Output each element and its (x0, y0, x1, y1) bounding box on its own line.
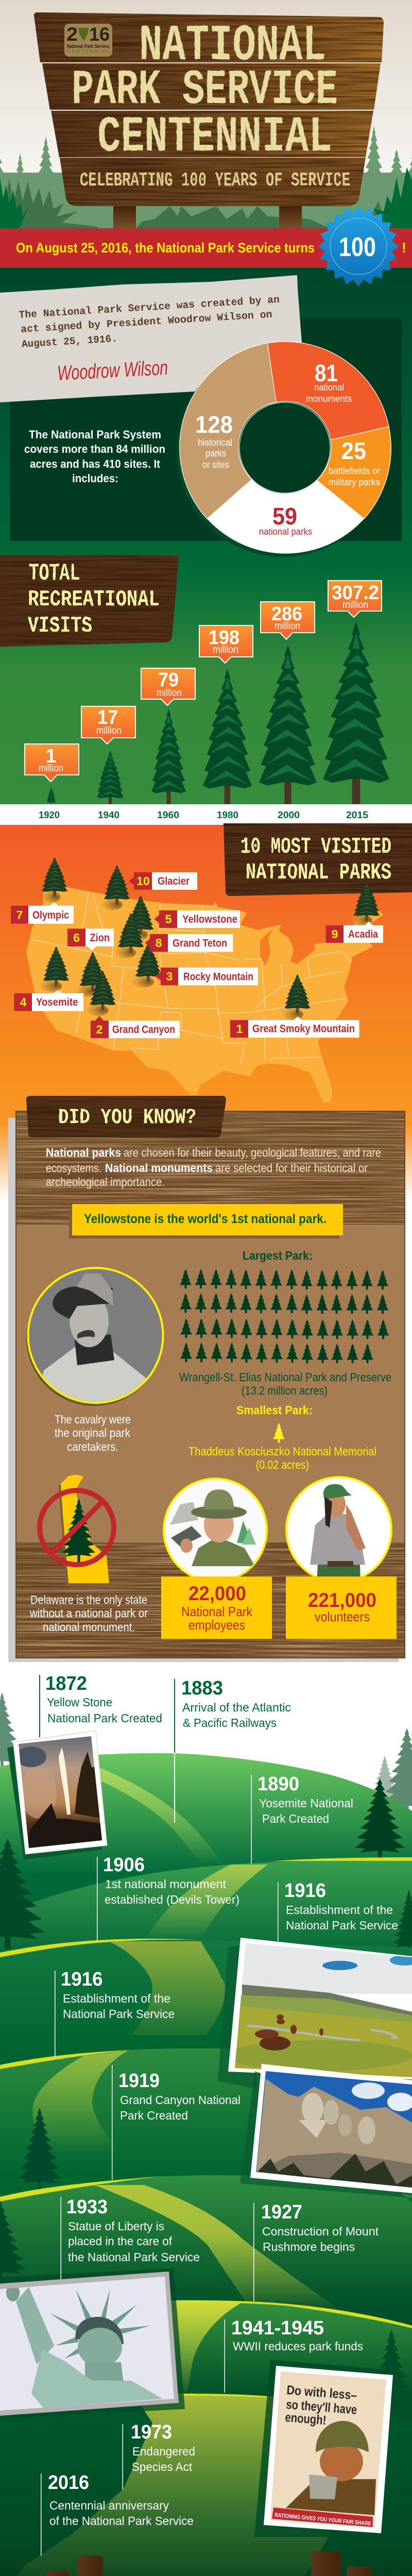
timeline: 1933 (61, 2196, 200, 2279)
timeline: 1916 left: 1916 (61, 1969, 103, 1990)
timeline background: hills and trees (0, 1692, 412, 2576)
map label: 5 Yellowstone: 5 (165, 912, 172, 926)
map label: 10 Glacier (129, 872, 197, 890)
text: national park system summary: covers more than 84 million (24, 443, 165, 455)
timeline photo: rationing poster: enough! (285, 2410, 327, 2428)
map label: 1 Great Smoky Mountain: 1 (236, 1022, 243, 1036)
portrait: park ranger (164, 1479, 267, 1582)
heading sign: did you know: DID YOU KNOW? (58, 1105, 196, 1130)
label: 59 national parks (259, 503, 312, 537)
portrait: park volunteer (286, 1477, 391, 1582)
timeline: 1927 (253, 2201, 379, 2301)
timeline: 1916 right: National Park Service (286, 1919, 398, 1932)
timeline: 2016 (41, 2472, 194, 2556)
callout: yellowstone: Yellowstone is the world's 1st national park. (84, 1212, 327, 1226)
text: parks versus monuments: ecosystems. (46, 1161, 101, 1175)
label: 128 historical parks (195, 411, 233, 470)
2016 centennial logo: National Park Service. (67, 44, 110, 49)
callout: 79 million: million (157, 688, 182, 699)
text: cavalry caretakers: the original park (55, 1426, 130, 1439)
chart axis: years: 1960 (157, 810, 179, 820)
map label: 1 Great Smoky Mountain: Great Smoky Mountain (252, 1023, 355, 1035)
wooden title sign planks (34, 12, 384, 206)
chart axis: years: 1980 (217, 810, 238, 820)
map label: 6 Zion: 6 (73, 931, 80, 944)
segment: national monuments (267, 342, 389, 440)
label: 25 battlefields: battlefields or (329, 466, 380, 476)
badge: 100 (318, 206, 399, 286)
note text: August 25, 1916. (21, 333, 117, 351)
label: 81 national monuments: national (314, 382, 344, 393)
callout: 286 million: 286 (271, 603, 302, 625)
timeline: 1973 (123, 2421, 195, 2490)
timeline: 1919: Grand Canyon National (120, 2093, 241, 2107)
timeline: 1933: the National Park Service (68, 2250, 200, 2264)
chart axis: years (0, 804, 412, 825)
text: cavalry caretakers: caretakers. (67, 1440, 118, 1453)
map label: 3 Rocky Mountain: Rocky Mountain (183, 971, 253, 983)
timeline photo: rationing poster: RATIONING GIVES YOU YOUR FAIR SHARE (274, 2512, 371, 2527)
anniversary banner (0, 228, 412, 268)
map label: 8 Grand Teton (145, 934, 233, 952)
2016 centennial logo: 2 (66, 24, 78, 45)
map label: 7 Olympic: Olympic (32, 909, 69, 921)
timeline: 1906: 1st national monument (105, 1877, 227, 1891)
label: 59 national parks: 59 (272, 503, 297, 530)
segment: historical parks (180, 343, 276, 519)
text: Thaddeus Kosciuszko: Thaddeus Kosciuszko National Memorial (188, 1445, 376, 1458)
text: parks versus monuments: archeological importance. (46, 1175, 165, 1189)
2016 centennial logo (64, 24, 112, 57)
text: cavalry caretakers: The cavalry were (55, 1413, 131, 1426)
label: 128 historical parks: 128 (195, 411, 233, 438)
timeline: 1919: 1919 (118, 2070, 160, 2092)
timeline: 1919 (112, 2065, 241, 2180)
title text: CENTENNIAL (97, 109, 332, 166)
timeline: 1906: 1906 (103, 1854, 145, 1876)
anniversary banner: On August 25, 2016, the National Park Service turns (16, 240, 315, 256)
timeline: 1941-1945: 1941-1945 (231, 2317, 324, 2339)
text: Wrangell-St. Elias: (13.2 million acres) (242, 1384, 328, 1397)
title text (72, 18, 350, 192)
label: 128 historical parks: parks (205, 448, 226, 459)
timeline: 2016: of the National Park Service (49, 2514, 194, 2528)
bar chart: tree heights per year (47, 621, 389, 805)
text: Thaddeus Kosciuszko: (0.02 acres) (256, 1458, 309, 1471)
section background: orange (0, 825, 412, 1201)
heading sign: total recreational visits: RECREATIONAL (28, 587, 160, 613)
timeline photo: rationing poster (254, 2360, 393, 2537)
icon chart: largest park trees (180, 1269, 389, 1363)
timeline: 1890: Yosemite National (259, 1797, 353, 1810)
label: 25 battlefields (329, 437, 380, 487)
text: largest park: Largest Park: (243, 1249, 313, 1262)
timeline: 1872: 1872 (45, 1673, 87, 1694)
timeline: 1927: Construction of Mount (262, 2225, 379, 2238)
timeline: 1872 (39, 1673, 162, 1737)
timeline: 1872: National Park Created (47, 1711, 162, 1725)
map label: 4 Yosemite: 4 (20, 995, 27, 1009)
text: national park system summary: acres and has 410 sites. It (30, 457, 161, 470)
timeline photo: bison in yellowstone (218, 1937, 412, 2089)
map label: 5 Yellowstone (154, 910, 240, 928)
callout: 198 million: 198 (209, 627, 239, 649)
label: 128 historical parks: historical (198, 437, 232, 448)
donut chart: park types (177, 342, 391, 557)
label: 25 battlefields: military parks (329, 477, 380, 487)
map label: 6 Zion: Zion (90, 932, 110, 944)
heading sign: total recreational visits: VISITS (28, 613, 92, 639)
callout: 307.2 million (328, 581, 382, 617)
callout: 198 million: million (213, 645, 238, 655)
tree 1940 (97, 751, 124, 805)
stat: 221,000 volunteers (286, 1577, 397, 1639)
label: 128 historical parks: or sites (202, 460, 229, 470)
timeline: 1883: Arrival of the Atlantic (182, 1701, 291, 1714)
stat: 221,000 volunteers: 221,000 (308, 1589, 376, 1612)
text: national park system summary: The National Park System (29, 428, 161, 441)
map label: 7 Olympic: 7 (16, 908, 23, 922)
chart axis: years: 1920 (39, 810, 60, 820)
timeline: 1883: & Pacific Railways (183, 1716, 277, 1730)
chart axis: years: 2015 (346, 810, 368, 820)
timeline: 1890: 1890 (258, 1773, 299, 1795)
heading sign: did you know (26, 1096, 226, 1138)
tree 2000 (259, 645, 317, 805)
segment: national parks (207, 479, 364, 554)
timeline: 1916 left (55, 1969, 175, 2057)
timeline: 1890 (251, 1773, 353, 1863)
callout: 79 million: 79 (158, 669, 179, 691)
map label: 4 Yosemite (14, 990, 83, 1011)
text: cavalry caretakers (55, 1413, 131, 1453)
note text: The National Park Service was created by an (19, 294, 280, 321)
map label: 7 Olympic (11, 902, 74, 924)
timeline: 1883: 1883 (181, 1677, 223, 1699)
map label: 10 Glacier: Glacier (158, 875, 190, 887)
map markers: trees (40, 857, 380, 1020)
icon: smallest park tree (273, 1423, 285, 1443)
section background: green (0, 268, 412, 804)
timeline: 1916 right: Establishment of the (286, 1903, 393, 1917)
title text: NATIONAL (139, 18, 326, 75)
text: national park system summary: includes: (72, 472, 118, 485)
timeline photo: geyser (7, 1731, 107, 1860)
map label: 2 Grand Canyon (91, 1016, 180, 1038)
timeline photo: rationing poster: Do with less– (286, 2383, 357, 2403)
text: delaware fact: without a national park or (29, 1606, 148, 1620)
label: 81 national monuments (306, 360, 352, 404)
portrait: cavalry officer (26, 1267, 164, 1406)
map label: 1 Great Smoky Mountain (230, 1016, 359, 1038)
segment: battlefields (317, 427, 391, 519)
timeline: 2016: 2016 (48, 2472, 89, 2494)
callout: 198 million (199, 625, 253, 663)
stat: 22,000 national park employees: 22,000 (188, 1583, 246, 1605)
heading sign: total recreational visits: TOTAL (29, 560, 80, 587)
timeline: 1973: Species Act (132, 2460, 193, 2473)
label: 25 battlefields: 25 (341, 437, 366, 464)
map label: 2 Grand Canyon: 2 (96, 1023, 102, 1036)
map label: 5 Yellowstone: Yellowstone (182, 913, 237, 925)
text: Wrangell-St. Elias (179, 1370, 391, 1397)
map label: 3 Rocky Mountain (155, 968, 258, 985)
timeline: 1941-1945 (225, 2317, 363, 2393)
text: delaware fact: national monument. (43, 1620, 135, 1634)
2016 centennial logo: 16 (89, 24, 110, 45)
callout: 307.2 million: million (342, 600, 368, 611)
text: delaware fact: Delaware is the only state (30, 1593, 147, 1606)
text: smallest park: Smallest Park: (236, 1403, 313, 1417)
timeline photo: rationing poster: so they'll have (286, 2397, 357, 2417)
anniversary banner: ! (402, 240, 406, 256)
map label: 8 Grand Teton: Grand Teton (173, 938, 227, 949)
text: Thaddeus Kosciuszko (188, 1445, 376, 1471)
map label: 3 Rocky Mountain: 3 (166, 970, 173, 983)
map label: 9 Acadia: 9 (332, 927, 338, 941)
callout: 1 million: million (39, 763, 63, 774)
text: parks versus monuments: are selected for their historical or (215, 1161, 368, 1175)
timeline: 1916 left: Establishment of the (63, 1992, 170, 2005)
sign posts (113, 206, 302, 229)
map label: 10 Glacier: 10 (136, 874, 150, 888)
timeline: 1916 right: 1916 (284, 1880, 326, 1902)
text: delaware fact (29, 1593, 148, 1634)
text: parks versus monuments: National parks (46, 1146, 121, 1159)
label: 59 national parks: national parks (259, 527, 312, 537)
callout: 79 million (141, 668, 195, 705)
map label: 4 Yosemite: Yosemite (36, 996, 78, 1008)
signature: Woodrow Wilson (57, 357, 168, 385)
timeline: 1933: placed in the care of (68, 2234, 173, 2248)
map label: 9 Acadia (326, 922, 383, 943)
map label: 8 Grand Teton: 8 (156, 936, 162, 950)
chart axis: years: 1940 (98, 810, 119, 820)
timeline: 2016: Centennial anniversary (49, 2499, 169, 2512)
hero background: sky and treeline (0, 0, 412, 232)
text: parks versus monuments: National monuments (105, 1161, 213, 1175)
callout: 1 million: 1 (45, 745, 57, 767)
timeline: 1973: 1973 (131, 2421, 172, 2443)
timeline: 1883 (174, 1677, 291, 1823)
stat: 221,000 volunteers: volunteers (315, 1609, 370, 1624)
heading sign: total recreational visits (0, 555, 179, 647)
tree 1920 (47, 787, 56, 805)
timeline photo: statue of liberty (0, 2268, 185, 2418)
timeline: 1906 (97, 1854, 239, 1941)
tree 1960 (151, 709, 186, 805)
heading sign: 10 most visited national parks (224, 823, 412, 896)
label: 81 national monuments: 81 (315, 360, 338, 386)
timeline photo: mount rushmore (240, 2064, 412, 2202)
timeline: 1906: established (Devils Tower) (105, 1893, 239, 1906)
callout: 17 million (81, 706, 135, 744)
text: parks versus monuments: are chosen for their beauty, geological features, and rare (124, 1146, 381, 1159)
callout: 17 million: 17 (97, 707, 118, 728)
stat: 22,000 national park employees: employees (188, 1617, 245, 1633)
timeline: 1973: Endangered (132, 2445, 195, 2458)
timeline: 1890: Park Created (262, 1812, 329, 1825)
map label: 9 Acadia: Acadia (348, 928, 378, 940)
chart axis: years: 2000 (278, 810, 300, 820)
timeline: 1927: Rushmore begins (263, 2240, 355, 2253)
torn paper note (0, 275, 302, 402)
note text (19, 294, 282, 351)
stat: 22,000 national park employees (161, 1577, 272, 1639)
timeline: 1919: Park Created (120, 2109, 188, 2122)
callout: 286 million: million (274, 621, 300, 632)
panel: did you know (8, 1111, 405, 1662)
tree 1980 (203, 669, 252, 805)
timeline: 1933: Statue of Liberty is (68, 2219, 164, 2233)
callout: 17 million: million (96, 725, 122, 736)
stat: 22,000 national park employees: National Park (181, 1604, 253, 1619)
text: national park system summary (24, 428, 165, 485)
timeline: 1927: 1927 (261, 2201, 302, 2223)
callout: 307.2 million: 307.2 (332, 582, 379, 604)
icon: delaware with no-park symbol (40, 1475, 114, 1586)
text: parks versus monuments (46, 1146, 381, 1189)
callout: 1 million (25, 744, 79, 782)
map: contiguous United States (26, 886, 384, 1102)
timeline: 1872: Yellow Stone (47, 1696, 112, 1709)
callout: 286 million (261, 602, 315, 639)
timeline: 1941-1945: WWII reduces park funds (233, 2340, 363, 2353)
badge: 100: 100 (339, 232, 376, 262)
timeline: 1916 left: National Park Service (63, 2007, 175, 2021)
panel: national park system (10, 318, 402, 541)
label: 81 national monuments: monuments (306, 394, 352, 404)
timeline: 1916 right (278, 1880, 398, 1941)
map label: 6 Zion (67, 928, 114, 951)
timeline: 1933: 1933 (66, 2196, 108, 2218)
map label: 2 Grand Canyon: Grand Canyon (112, 1024, 175, 1036)
closing sign posts (46, 2551, 372, 2576)
tree 2015 (323, 621, 389, 805)
2016 centennial logo: CENTENNIAL (67, 48, 109, 54)
note text: act signed by President Woodrow Wilson on (21, 309, 272, 336)
callout: yellowstone (69, 1204, 343, 1239)
